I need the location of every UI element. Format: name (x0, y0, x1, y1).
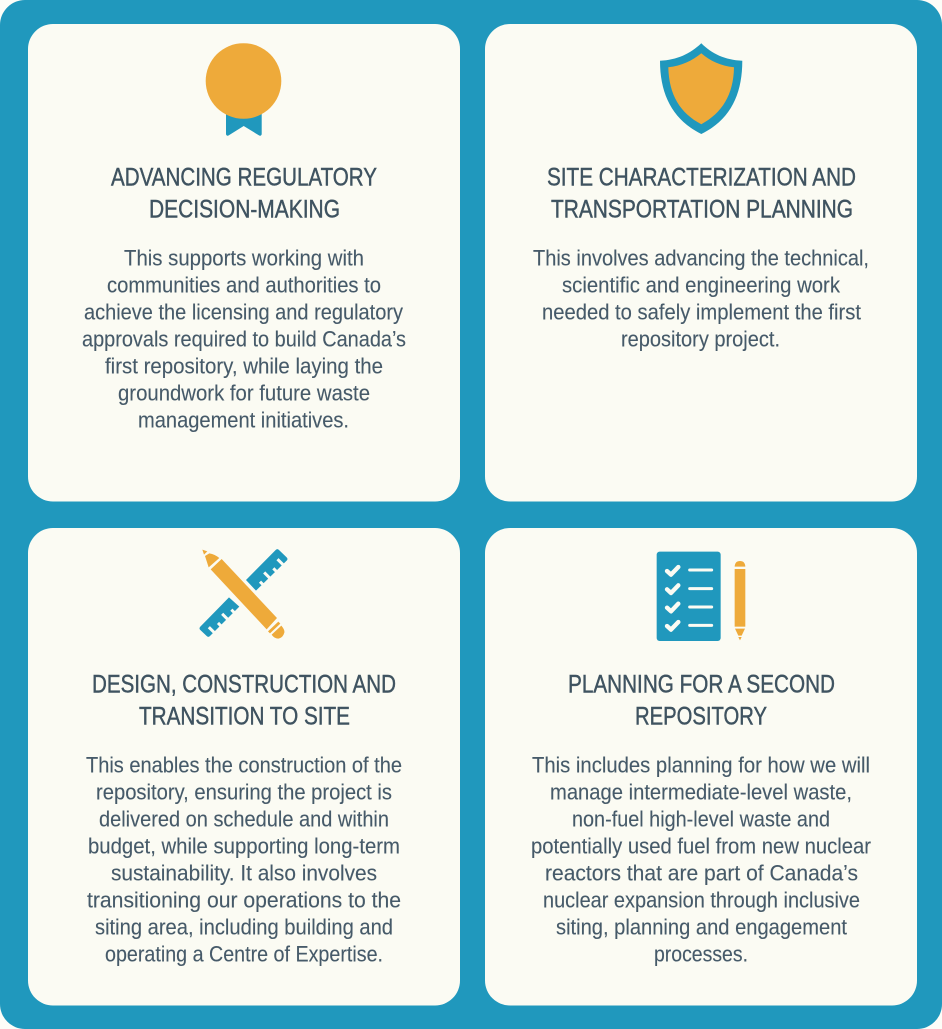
body text (86, 752, 402, 966)
body text: This enables the construction of the (86, 752, 402, 777)
panel background (485, 528, 917, 1006)
body text: scientific and engineering work (562, 272, 841, 297)
heading: SITE CHARACTERIZATION AND (547, 163, 856, 191)
body text: management initiatives. (138, 407, 349, 432)
body text: siting, planning and engagement (556, 914, 848, 939)
panel background (28, 528, 460, 1006)
body text: reactors that are part of Canada’s (545, 860, 858, 885)
panel: advancing regulatory decision-making (28, 24, 460, 502)
body text (82, 245, 406, 432)
heading: REPOSITORY (635, 702, 767, 730)
body text: first repository, while laying the (105, 353, 383, 378)
panel: design, construction and transition to site (28, 528, 460, 1006)
panel: site characterization and transportation planning (485, 24, 917, 502)
body text: budget, while supporting long-term (88, 833, 400, 858)
icon: pencil and ruler (199, 549, 287, 639)
body text: siting area, including building and (95, 914, 393, 939)
panel: planning for a second repository (485, 528, 917, 1006)
panel background (28, 24, 460, 502)
body text: transitioning our operations to the (87, 887, 401, 912)
body text: achieve the licensing and regulatory (84, 299, 404, 324)
icon: medal (206, 43, 281, 136)
heading: DESIGN, CONSTRUCTION AND (92, 670, 396, 698)
heading: ADVANCING REGULATORY (111, 163, 377, 191)
body text: sustainability. It also involves (111, 860, 377, 885)
body text: operating a Centre of Expertise. (105, 941, 383, 966)
body text: processes. (654, 941, 748, 966)
heading (111, 163, 377, 223)
body text: nuclear expansion through inclusive (543, 887, 860, 912)
body text: manage intermediate-level waste, (550, 779, 852, 804)
heading: TRANSITION TO SITE (139, 702, 350, 730)
icon: shield (660, 43, 742, 134)
body text: potentially used fuel from new nuclear (531, 833, 871, 858)
body text: This supports working with (124, 245, 364, 270)
body text: delivered on schedule and within (99, 806, 389, 831)
body text (531, 752, 871, 966)
icon: checklist and pencil (657, 552, 745, 641)
heading (568, 670, 835, 730)
clipboard (657, 552, 721, 641)
body text: repository project. (621, 326, 780, 351)
body text: non-fuel high-level waste and (572, 806, 830, 831)
heading (547, 163, 856, 223)
heading: TRANSPORTATION PLANNING (551, 195, 853, 223)
heading: PLANNING FOR A SECOND (568, 670, 835, 698)
panel background (485, 24, 917, 502)
body text: This includes planning for how we will (532, 752, 870, 777)
heading: DECISION-MAKING (149, 195, 340, 223)
body text: needed to safely implement the first (542, 299, 862, 324)
pencil (735, 561, 745, 640)
body text: repository, ensuring the project is (96, 779, 392, 804)
body text: approvals required to build Canada’s (82, 326, 406, 351)
body text: groundwork for future waste (118, 380, 370, 405)
heading (92, 670, 396, 730)
body text (533, 245, 869, 351)
body text: communities and authorities to (107, 272, 381, 297)
body text: This involves advancing the technical, (533, 245, 869, 270)
checks and lines (667, 567, 712, 630)
